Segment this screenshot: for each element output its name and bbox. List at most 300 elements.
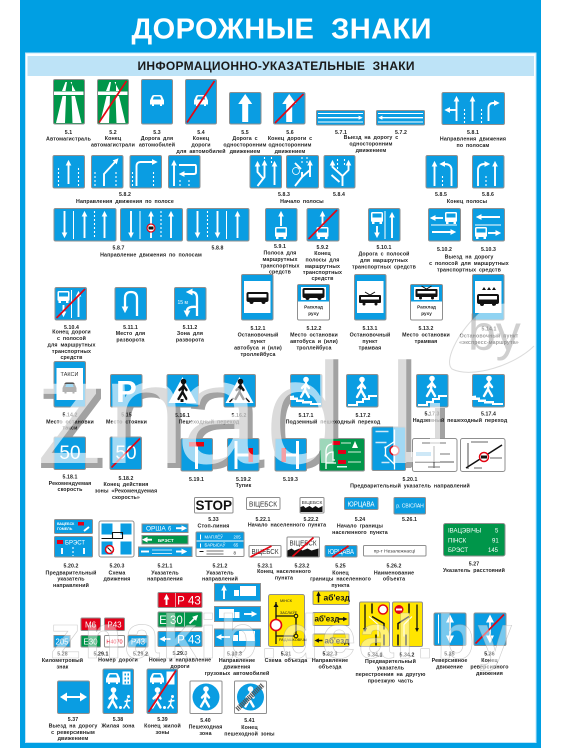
sign 5.19.1 dead end — [181, 438, 212, 471]
sign 5.13.2 tram stop with plate: руху — [421, 311, 432, 316]
sign 5.17.1 underpass — [290, 374, 322, 407]
caption 5.4: Конец — [193, 136, 210, 142]
sign 5.12.2 bus stop with plate: руху — [308, 311, 319, 316]
caption 5.34: проезжую часть — [368, 678, 414, 684]
sign 5.21.1 direction indicators — [138, 524, 192, 556]
sign 5.31 detour scheme: РАДАШКОВІЧЫ — [279, 638, 308, 642]
sign 5.21.1 direction indicators: 6 — [168, 526, 172, 532]
caption 5.10.4: для маршрутных — [47, 342, 96, 348]
caption 5.10.4: средств — [60, 355, 83, 361]
caption 5.8.3: 5.8.3 — [278, 192, 290, 198]
signs 5.29.2 road numbers — [104, 618, 148, 647]
caption 5.19.2: 5.19.2 — [236, 477, 251, 483]
sign 5.26.2 object name — [364, 546, 426, 556]
sign 5.18.1 recommended speed — [54, 437, 86, 470]
caption 5.17.1 and 5.17.2: 5.17.1 — [298, 413, 314, 419]
caption 5.18.2: 5.18.2 — [118, 476, 134, 482]
sign 5.16.1 pedestrian crossing — [167, 374, 198, 407]
caption 5.20.2: Предварительный — [46, 570, 96, 576]
caption 5.41: 5.41 — [244, 718, 255, 724]
sign 5.14.2 taxi — [54, 362, 86, 407]
sign 5.7.2 — [376, 110, 424, 125]
caption 5.28: Километровый — [42, 657, 83, 664]
caption 5.13.2: трамвая — [415, 339, 437, 345]
caption 5.6: движением — [275, 149, 305, 155]
caption 5.20.3: Схема — [109, 570, 125, 576]
caption 5.12.1: пункт — [250, 339, 266, 345]
caption 5.10.1: для маршрутных — [360, 258, 408, 264]
caption 5.30.3: грузовых автомобилей — [205, 670, 269, 677]
caption 5.8.4: 5.8.4 — [333, 192, 345, 198]
signs 5.29.2 road numbers: Н4070 — [106, 640, 123, 646]
sign 5.20.2 preliminary signs: БРЭСТ — [65, 540, 85, 546]
section heading band: ИНФОРМАЦИОННО-УКАЗАТЕЛЬНЫЕ ЗНАКИ — [138, 59, 414, 73]
caption 5.34: перестроения на другую — [355, 672, 426, 678]
caption 5.18.2: Конец действия — [104, 481, 148, 488]
sign 5.25 end of boundary: ЮРЦАВА — [328, 547, 354, 556]
watermark large translucent letters: znadl — [30, 327, 416, 495]
sign 5.22.2 settlement start with skyline — [300, 498, 324, 513]
caption 5.8.5 and 5.8.6: Конец полосы — [447, 199, 487, 205]
caption 5.3: Дорога для — [141, 136, 173, 142]
caption 5.11.1: 5.11.1 — [123, 325, 138, 331]
caption 5.25: пункта — [331, 583, 350, 589]
caption 5.7 name: движением — [356, 148, 386, 154]
sign 5.31 detour scheme — [268, 594, 308, 646]
caption 5.13.1: трамвая — [359, 346, 381, 352]
sign 5.26.1 object name: р. СВІСЛАН — [396, 504, 424, 510]
sign 5.29.3 blue road number: Р 43 — [177, 634, 201, 646]
sign 5.29.3 green road number: Е 30 — [159, 615, 183, 627]
sign 5.29.3 red road number: Р 43 — [177, 596, 201, 608]
sign 5.21.1 direction indicators: БРЭСТ — [158, 538, 174, 543]
caption 5.30.3: Направление — [219, 658, 255, 664]
caption 5.36: 5.36 — [484, 652, 495, 658]
sign 5.8.2 c — [130, 156, 162, 188]
caption 5.20.3: 5.20.3 — [109, 564, 125, 570]
sign 5.29.3 blue road number — [158, 632, 202, 646]
caption 5.18.1: 5.18.1 — [62, 474, 78, 480]
sign 5.27 distance indicator: БРЭСТ — [448, 548, 468, 554]
caption 5.14.2: 5.14.2 — [62, 412, 78, 418]
sign 5.27 distance indicator — [444, 524, 505, 556]
caption 5.34: 5.34.1 — [367, 652, 383, 658]
caption 5.10.4: с полосой — [57, 335, 86, 342]
caption 5.10.1: Дорога с полосой — [358, 250, 410, 258]
caption 5.9.1: 5.9.1 — [274, 244, 286, 250]
caption 5.22: 5.22.1 — [255, 517, 271, 523]
caption 5.26.1: 5.26.1 — [402, 517, 417, 523]
caption 5.19.1: 5.19.1 — [189, 477, 204, 483]
caption 5.20.2: указатель — [57, 576, 85, 582]
sign 5.31 detour scheme: МІНСК — [280, 599, 293, 603]
caption 5.9.1: транспортных — [260, 264, 300, 270]
sign 5.27 distance indicator: 91 — [492, 538, 499, 544]
caption 5.30.3: движения — [223, 664, 251, 670]
sign 5.40 pedestrian zone — [190, 681, 222, 714]
caption 5.10.1: транспортных средств — [352, 264, 417, 270]
caption 5.18.2: зоны «Рекомендуемая — [95, 488, 157, 494]
sign 5.20.1 green direction board — [320, 438, 364, 471]
caption 5.6: односторонним — [268, 142, 312, 148]
sign 5.20.3 traffic scheme — [99, 521, 134, 557]
sign 5.37 exit to reversible road — [58, 681, 90, 714]
sign 5.8.7 — [54, 208, 116, 241]
sign 5.3 road for cars — [142, 80, 172, 124]
caption 5.12.1: троллейбуса — [240, 351, 276, 358]
caption 5.25: 5.25 — [335, 564, 346, 570]
sign 5.8.7 variant with prohibition — [120, 208, 182, 241]
caption 5.13.1: пункт — [362, 339, 378, 345]
sign 5.31 detour scheme: ЗАСЛАЎЕ — [280, 611, 298, 615]
sign 5.24 settlement boundary: ЮРЦАВА — [348, 500, 374, 508]
sign 5.33 stop line: STOP — [196, 498, 232, 513]
caption 5.14.1: 5.14.1 — [481, 326, 497, 332]
sign 5.32 detour direction: аб'езд — [324, 592, 350, 602]
caption 5.35: движение — [436, 664, 463, 670]
caption 5.35: 5.35 — [444, 652, 455, 658]
caption 5.14.2: Место остановки — [46, 419, 94, 425]
sign 5.8.2 b — [92, 156, 123, 188]
caption 5.21.2: Указатель — [206, 570, 234, 576]
caption 5.10.2 and 5.10.3: 5.10.2 — [437, 247, 452, 253]
caption 5.21.1: 5.21.1 — [157, 564, 173, 570]
sign 5.22.1 settlement start: ВІЦЕБСК — [249, 500, 278, 508]
caption 5.13.2: Место остановки — [402, 332, 450, 338]
caption 5.15: 5.15 — [121, 412, 132, 418]
caption 5.29.3: 5.29.3 — [172, 651, 188, 657]
sign 5.12.2 bus stop with plate: Расклад — [304, 304, 323, 310]
caption 5.24: населенного пункта — [332, 530, 388, 536]
sign 5.26.2 object name: пр-т Незалежнасці — [374, 548, 415, 554]
caption 5.9.2: средств — [311, 276, 334, 282]
sign 5.8.3 a — [250, 156, 282, 188]
caption 5.31: Схема объезда — [265, 657, 307, 664]
sign 5.34.1 — [360, 602, 390, 646]
caption 5.11.1: Место для — [116, 331, 145, 337]
sign 5.6 end of one-way road — [274, 92, 305, 124]
caption 5.8.1: по полосам — [457, 143, 489, 149]
caption 5.21.2: направлений — [202, 576, 238, 582]
caption 5.7 name: односторонним — [349, 142, 393, 148]
caption 5.41: Конец — [241, 725, 258, 731]
caption 5.14.1: Остановочный пункт — [460, 332, 519, 340]
caption 5.10.2 and 5.10.3: с полосой для маршрутных — [429, 260, 509, 267]
caption 5.37: с реверсивным — [51, 730, 95, 736]
sign 5.21.2 direction indicator: 8 — [234, 550, 236, 556]
caption 5.1: 5.1 — [65, 130, 72, 136]
sign 5.22.2 settlement start with skyline: ВІЦЕБСК — [302, 500, 323, 506]
sign 5.38 living zone — [103, 669, 134, 714]
sign 5.11.2 U-turn zone: 15 м — [178, 300, 188, 306]
caption 5.14.2: такси — [63, 426, 77, 432]
caption 5.29.3: дороги — [170, 664, 190, 670]
caption 5.29.1 and 5.29.2: 5.29.1 — [93, 652, 109, 658]
sign 5.20.1 white board — [412, 438, 457, 472]
caption 5.26.2: объекта — [383, 576, 405, 582]
caption 5.17.3 and 5.17.4: 5.17.4 — [481, 412, 496, 418]
caption 5.34: Предварительный — [365, 658, 416, 665]
watermark shadow letters: znadl — [35, 332, 421, 500]
sign 5.2 end of motorway — [98, 80, 128, 124]
caption 5.17.1 and 5.17.2: 5.17.2 — [355, 413, 371, 419]
caption 5.5: односторонним — [223, 142, 267, 148]
sign 5.32 detour direction: аб'езд — [324, 636, 349, 646]
sign 5.4 end of road for cars — [186, 80, 216, 124]
caption 5.12.2: Место остановки — [290, 332, 338, 338]
sign 5.30 truck directions — [214, 584, 260, 646]
caption 5.39: зоны — [156, 730, 170, 736]
sign 5.5 one-way road — [230, 92, 261, 124]
caption 5.22: 5.22.2 — [303, 517, 319, 523]
sign 5.8.1 — [442, 92, 504, 124]
sign 5.20.1 white board with prohibition — [460, 438, 505, 472]
caption 5.10.4: Конец дороги — [52, 330, 91, 336]
caption 5.16: Пешеходный переход — [179, 418, 240, 426]
caption 5.28: знак — [57, 664, 69, 670]
caption 5.38: 5.38 — [113, 717, 123, 723]
caption 5.39: 5.39 — [157, 717, 168, 723]
sign 5.16.2 pedestrian crossing — [224, 374, 256, 407]
caption 5.23: 5.23.1 — [257, 564, 273, 570]
sign 5.34.2 — [392, 602, 422, 646]
caption 5.39: Конец жилой — [144, 722, 181, 730]
caption 5.12.2: троллейбуса — [296, 344, 332, 352]
caption 5.25: Конец — [332, 570, 349, 576]
caption 5.11.2: разворота — [176, 338, 204, 344]
sign 5.15 parking: P — [116, 374, 137, 409]
caption 5.33: Стоп-линия — [198, 524, 229, 530]
caption 5.10.2 and 5.10.3: Выезд на дорогу — [445, 254, 493, 260]
caption 5.16: 5.16.2 — [231, 413, 247, 419]
caption 5.9.1: средств — [269, 270, 292, 276]
caption 5.19.3: 5.19.3 — [283, 477, 298, 483]
caption 5.33: 5.33 — [208, 517, 219, 523]
caption 5.11.1: разворота — [116, 338, 145, 344]
caption 5.9.2: маршрутных — [305, 264, 340, 270]
caption 5.9.1: Полоса для — [263, 250, 297, 256]
caption 5.21.1: направления — [147, 576, 183, 582]
caption 5.4: 5.4 — [197, 130, 205, 136]
sign 5.18.1 recommended speed: 50 — [59, 443, 81, 464]
caption 5.7 name: Выезд на дорогу с — [344, 135, 398, 141]
watermark site name: znakib.deal.by — [50, 603, 513, 672]
caption 5.24: Начало границы — [337, 524, 383, 530]
caption 5.12.1: Остановочный — [238, 332, 278, 338]
caption 5.3: 5.3 — [153, 130, 161, 136]
caption 5.19.2: Тупик — [236, 483, 252, 489]
sign 5.11.2 U-turn zone — [174, 288, 206, 320]
caption 5.13.1: 5.13.1 — [362, 326, 378, 332]
caption 5.14.1: «экспресс-маршрута» — [459, 340, 519, 346]
sign 5.10.2 — [428, 208, 460, 241]
sign 5.21.1 direction indicators: ОРША — [146, 526, 166, 532]
signs 5.29.1 road numbers: М6 — [85, 620, 97, 630]
caption 5.10.4: 5.10.4 — [64, 325, 79, 331]
sign 5.19.3 dead end — [275, 438, 306, 471]
sign 5.28 kilometre marker — [54, 636, 70, 647]
sign 5.8.6 — [472, 156, 504, 188]
caption 5.10.1: 5.10.1 — [376, 245, 392, 251]
sign 5.7.1 — [316, 110, 364, 125]
caption 5.27: Указатель расстояний — [443, 567, 505, 574]
caption 5.16: 5.16.1 — [175, 413, 190, 419]
caption 5.41: пешеходной зоны — [224, 730, 275, 738]
sign 5.9.2 — [307, 208, 339, 241]
caption 5.20.1: Предварительный указатель направлений — [350, 482, 470, 490]
caption 5.36: Конец — [481, 658, 498, 664]
sign 5.23.1 end of settlement: ВІЦЕБСК — [252, 547, 279, 556]
caption 5.17.3 and 5.17.4: 5.17.3 — [424, 412, 440, 418]
sign 5.1 motorway — [54, 80, 84, 124]
sign 5.22.1 settlement start — [246, 498, 280, 510]
caption 5.20.3: движения — [103, 576, 131, 582]
caption 5.37: 5.37 — [68, 717, 78, 723]
caption 5.12.2: автобуса и (или) — [290, 338, 338, 345]
caption 5.7.2: 5.7.2 — [395, 130, 407, 136]
caption 5.23: 5.23.2 — [294, 564, 310, 570]
sign 5.14.2 taxi: ТАКСИ — [61, 372, 78, 378]
caption 5.10.2 and 5.10.3: транспортных средств — [437, 268, 502, 274]
sign 5.10.4 — [55, 288, 86, 320]
sign 5.15 parking — [110, 374, 142, 409]
caption 5.4: для автомобилей — [176, 148, 226, 155]
caption 5.26.2: Наименование — [374, 570, 414, 576]
caption 5.8.5 and 5.8.6: 5.8.6 — [482, 192, 494, 198]
sign 5.8.2 d — [168, 156, 200, 188]
sign 5.18.2 end of recommended speed: 50 — [115, 443, 137, 464]
sign 5.39 end of living zone — [147, 669, 178, 714]
caption 5.20.2: направлений — [53, 582, 89, 589]
caption 5.23: пункта — [275, 576, 293, 582]
caption 5.35: Реверсивное — [432, 658, 467, 664]
caption 5.9.2: 5.9.2 — [316, 245, 329, 251]
caption 5.6: Конец дороги с — [268, 136, 312, 142]
sign 5.27 distance indicator: 145 — [488, 548, 499, 554]
sign 5.23.2 end of settlement with skyline — [287, 537, 320, 557]
sign 5.14.1 express stop — [472, 274, 504, 320]
sign 5.20.1 blue direction board — [372, 427, 406, 470]
sign 5.27 distance indicator: ПІНСК — [448, 538, 467, 544]
caption 5.29.1 and 5.29.2: 5.29.2 — [133, 652, 148, 658]
sign 5.21.2 direction indicator — [196, 532, 244, 556]
sign 5.25 end of boundary — [325, 546, 357, 557]
sign 5.8.8 — [187, 208, 249, 241]
sign 5.17.4 overpass — [472, 374, 504, 407]
caption 5.8.1: Направления движения — [440, 136, 506, 142]
caption 5.2: Конец — [105, 136, 122, 142]
sign 5.20.2 preliminary signs: ГОМЕЛЬ — [57, 527, 73, 531]
caption 5.40: 5.40 — [200, 718, 211, 724]
caption 5.40: зона — [199, 731, 212, 737]
sign 5.20.2 preliminary signs: ВАЦЕБСК — [57, 522, 75, 526]
caption 5.15: Место стоянки — [106, 419, 147, 425]
caption 5.37: Выезд на дорогу — [49, 724, 97, 730]
caption 5.38: Жилая зона — [100, 724, 135, 730]
caption 5.10.2 and 5.10.3: 5.10.3 — [481, 247, 496, 253]
caption 5.34: указатель — [377, 666, 405, 672]
sign 5.29.3 red road number — [158, 592, 202, 608]
caption 5.9.2: полосы для — [306, 258, 339, 264]
caption 5.8.2: Направления движения по полосе — [76, 199, 174, 205]
caption 5.1: Автомагистраль — [46, 136, 92, 142]
caption 5.20.2: 5.20.2 — [63, 564, 79, 570]
sign 5.21.2 direction indicator: 205 — [234, 534, 241, 540]
sign 5.21.2 direction indicator: МАГІЛЁЎ — [204, 534, 223, 540]
sign 5.35 reversible traffic — [434, 613, 466, 646]
sign 5.28 kilometre marker: 205 — [55, 638, 69, 646]
caption 5.29.1 and 5.29.2: Номер дороги — [98, 658, 138, 664]
sign 5.9.1 — [266, 208, 297, 241]
caption 5.18.1: скорость — [58, 487, 83, 493]
sign 5.21.2 direction indicator: 65 — [234, 542, 239, 548]
caption 5.5: движением — [230, 149, 260, 155]
caption 5.21.1: Указатель — [151, 570, 179, 576]
caption 5.2: автомагистрали — [91, 142, 135, 148]
caption 5.31: 5.31 — [281, 652, 291, 658]
caption 5.8.8: 5.8.8 — [211, 246, 224, 252]
sign 5.23.1 end of settlement — [249, 546, 281, 557]
caption 5.9.1: маршрутных — [262, 257, 298, 263]
sign 5.29.3 green road number — [158, 612, 202, 627]
caption 5.17.3 and 5.17.4: Надземный пешеходный переход — [413, 417, 508, 424]
caption 5.36: реверсивного — [470, 664, 509, 670]
caption 5.8.5 and 5.8.6: 5.8.5 — [435, 192, 447, 198]
signs 5.29.2 road numbers: Р43 — [107, 620, 122, 630]
sign 5.21.2 direction indicator: БАРЫСАЎ — [204, 542, 226, 548]
sign 5.12.1 bus stop — [242, 274, 273, 320]
caption 5.12.2: 5.12.2 — [306, 326, 322, 332]
caption 5.27: 5.27 — [469, 562, 479, 568]
caption 5.32.3: Направление — [312, 658, 348, 664]
caption 5.7.1: 5.7.1 — [335, 130, 347, 136]
signs 5.29.1 road numbers: Е30 — [83, 638, 98, 646]
caption 5.3: автомобилей — [139, 142, 175, 148]
sign 5.36 end of reversible traffic — [474, 613, 506, 646]
caption 5.5: 5.5 — [241, 130, 249, 136]
title: ДОРОЖНЫЕ ЗНАКИ — [132, 14, 432, 46]
caption 5.8.1: 5.8.1 — [467, 130, 479, 136]
sign 5.8.3 b — [286, 156, 318, 188]
sign 5.26.1 object name — [394, 498, 426, 514]
caption 5.11.2: Зона для — [177, 331, 203, 337]
caption 5.5: Дорога с — [232, 136, 258, 142]
sign 5.13.2 tram stop with plate — [410, 284, 442, 320]
caption 5.32.3: 5.32.3 — [322, 652, 338, 658]
sign 5.8.4 — [324, 156, 355, 188]
sign 5.10.1 — [368, 208, 400, 241]
sign 5.24 settlement boundary — [344, 498, 378, 510]
caption 5.8.2: 5.8.2 — [119, 192, 131, 198]
sign 5.13.1 tram stop — [354, 274, 386, 320]
caption 5.11.2: 5.11.2 — [183, 325, 197, 331]
sign 5.11.1 U-turn — [115, 288, 146, 320]
caption 5.9.2: транспортных — [303, 270, 342, 276]
caption 5.13.1: Остановочный — [350, 332, 390, 338]
watermark logo badge: by — [468, 305, 521, 361]
sign 5.27 distance indicator: ІВАЦЭВІЧЫ — [448, 528, 481, 534]
caption 5.10.4: транспортных — [52, 349, 91, 355]
caption 5.8.3: Начало полосы — [280, 199, 324, 205]
sign 5.23.2 end of settlement with skyline: ВІЦЕБСК — [290, 538, 317, 548]
caption 5.12.1: 5.12.1 — [250, 326, 266, 332]
caption 5.13.2: 5.13.2 — [418, 326, 434, 332]
signs 5.29.2 road numbers: Р43 — [131, 638, 146, 646]
sign 5.10.3 — [472, 208, 504, 241]
sign 5.8.5 — [426, 156, 458, 188]
signs 5.29.1 road numbers — [81, 618, 100, 647]
caption 5.18.1: Рекомендуемая — [49, 481, 91, 487]
